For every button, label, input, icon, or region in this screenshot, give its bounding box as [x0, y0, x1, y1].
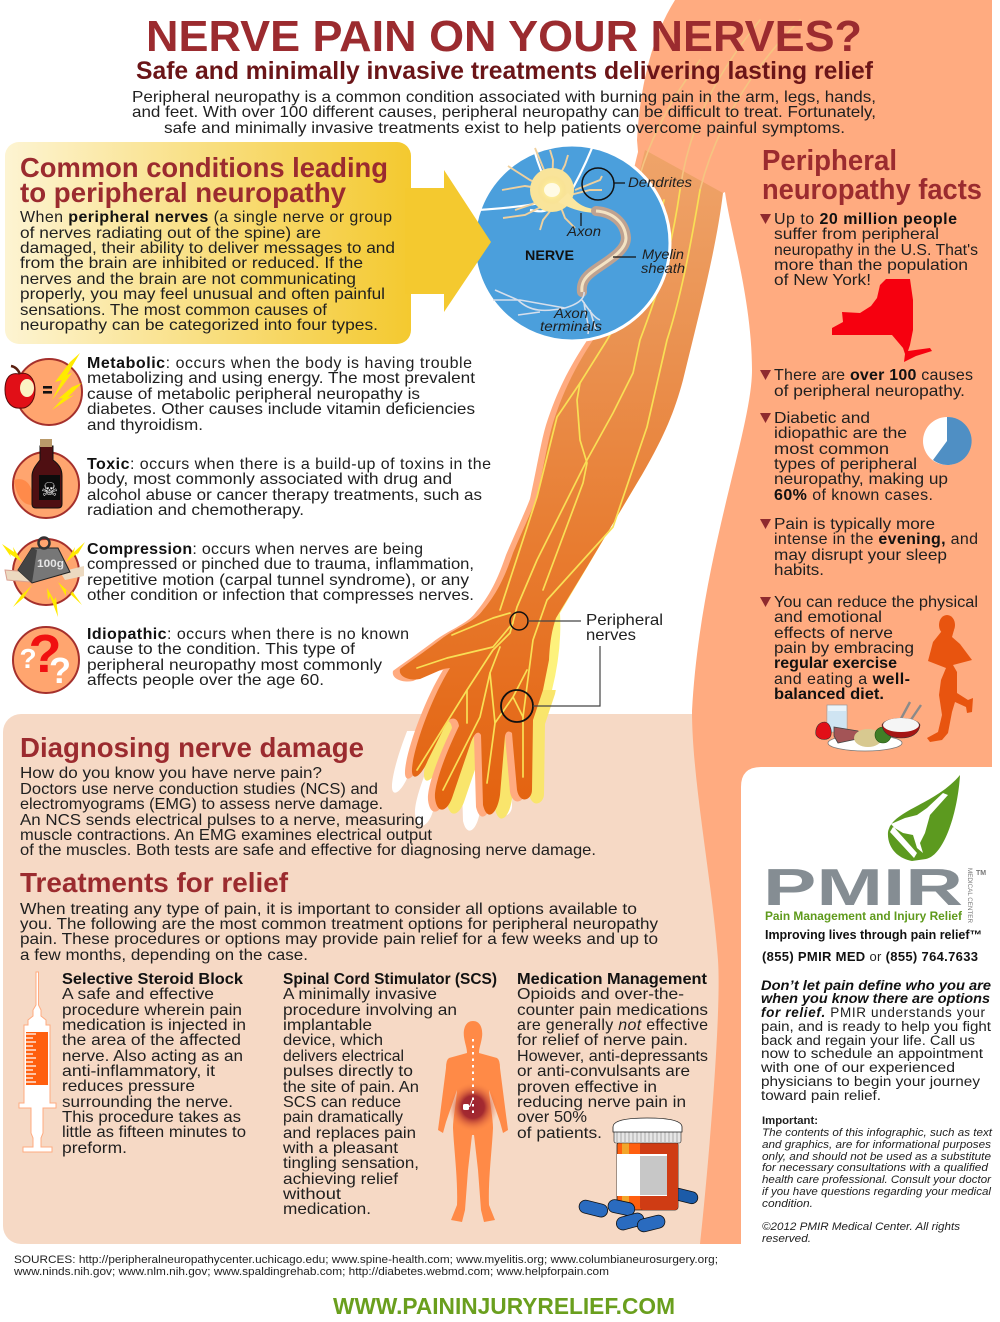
- treatment: selective steroid block: This procedure takes as: [62, 1109, 241, 1126]
- text: important disclaimer: Important:: [762, 1115, 818, 1127]
- treatment: spinal cord stimulator: achieving relief: [283, 1171, 399, 1188]
- fact: evening pain: habits.: [774, 562, 824, 579]
- heading: treatments: Treatments for relief: [20, 867, 289, 898]
- treatment: medication management: However, anti-depressants: [517, 1048, 708, 1065]
- icon: New York state map: [832, 279, 932, 362]
- text: important disclaimer: and graphics, are for informational purposes: [762, 1139, 992, 1151]
- fact: over 100 causes: There are over 100 causes: [774, 367, 973, 384]
- fact: diabetic and idiopathic: Diabetic and: [774, 410, 870, 427]
- intro text: and feet. With over 100 different causes, peripheral neuropathy can be difficult to treat. Fortunately,: [132, 104, 876, 121]
- text: sources: [13, 1254, 718, 1278]
- fact: diabetic and idiopathic: neuropathy, making up: [774, 471, 948, 488]
- text: compression: repetitive motion (carpal tunnel syndrome), or any: [87, 572, 469, 589]
- text: compression: other condition or infection that compresses nerves.: [87, 587, 474, 604]
- treatment: medication management: are generally not effective: [517, 1017, 708, 1034]
- icon: compression weight: 100g: [37, 558, 64, 570]
- treatment: selective steroid block: surrounding the nerve.: [62, 1094, 233, 1111]
- panel: common conditions: [5, 142, 411, 344]
- treatment: spinal cord stimulator: SCS can reduce: [283, 1094, 401, 1111]
- text: metabolic: metabolizing and using energy. The most prevalent: [87, 370, 476, 387]
- heading: facts: [762, 145, 982, 206]
- fact: diabetic and idiopathic: 60% of known cases.: [774, 487, 933, 504]
- text: call to action: toward pain relief.: [761, 1088, 881, 1103]
- fact: evening pain: may disrupt your sleep: [774, 547, 947, 564]
- callout: peripheral nerves: nerves: [586, 627, 636, 644]
- icon: runner: [927, 615, 973, 742]
- treatment: spinal cord stimulator: without: [282, 1186, 342, 1203]
- heading: facts: Peripheral: [762, 145, 897, 177]
- heading: common conditions: [20, 152, 388, 208]
- treatment: spinal cord stimulator: procedure involving an: [283, 1002, 457, 1019]
- text: diagnosing body: Doctors use nerve conduction studies (NCS) and: [20, 781, 378, 798]
- fact: diabetic and idiopathic: idiopathic are the: [774, 425, 907, 442]
- text: metabolic: Metabolic: occurs when the body is having trouble: [87, 355, 472, 372]
- treatment: selective steroid block: the area of the affected: [62, 1032, 241, 1049]
- text: treatments body: you. The following are the most common treatment options for peripheral neuropathy: [20, 916, 658, 933]
- icon: compression weight: [2, 538, 85, 617]
- text: metabolic: cause of metabolic peripheral neuropathy is: [87, 386, 420, 403]
- fact: evening pain: [760, 516, 978, 579]
- text: metabolic: and thyroidism.: [87, 417, 203, 434]
- treatment: spinal cord stimulator: and replaces pain: [283, 1125, 416, 1142]
- fact: exercise and diet: balanced diet.: [774, 686, 884, 703]
- treatment: selective steroid block: [62, 971, 246, 1157]
- text: compression: [87, 541, 474, 604]
- text: toxic: Toxic: occurs when there is a build-up of toxins in the: [87, 456, 491, 473]
- text: compression: compressed or pinched due to trauma, inflammation,: [87, 556, 474, 573]
- text: diagnosing body: electromyograms (EMG) to assess nerve damage.: [20, 796, 383, 813]
- heading: common conditions: Common conditions leading: [20, 152, 388, 183]
- icon: healthy meal: [816, 702, 921, 751]
- fact: over 100 causes: of peripheral neuropathy.: [774, 383, 965, 400]
- text: conditions intro: of nerves radiating out of the spine) are: [20, 225, 321, 242]
- icon: question marks: [13, 624, 79, 693]
- text: toxic: body, most commonly associated with drug and: [87, 471, 452, 488]
- panel: diagnosing text: [20, 732, 596, 859]
- diagram labels: NERVE: [525, 247, 574, 263]
- illustration: arm with peripheral nerves: [380, 20, 800, 831]
- fact: exercise and diet: pain by embracing: [774, 640, 914, 657]
- treatment: medication management: Medication Management: [517, 971, 708, 988]
- treatment: selective steroid block: nerve. Also acting as an: [62, 1048, 243, 1065]
- text: important disclaimer: The contents of this infographic, such as text: [762, 1127, 993, 1139]
- axon terminals: [493, 290, 600, 334]
- treatment: selective steroid block: Selective Steroid Block: [62, 971, 243, 988]
- fact: evening pain: Pain is typically more: [774, 516, 935, 533]
- text: idiopathic: cause to the condition. This type of: [87, 641, 356, 658]
- treatment: selective steroid block: preform.: [62, 1140, 127, 1157]
- treatment: selective steroid block: reduces pressure: [62, 1078, 195, 1095]
- text: toxic: [87, 456, 491, 519]
- text: call to action: now to schedule an appointment: [761, 1046, 983, 1061]
- treatment: medication management: proven effective in: [517, 1079, 657, 1096]
- text: diagnosing body: of the muscles. Both tests are safe and effective for diagnosing nerve damage.: [20, 842, 596, 859]
- text: call to action: Don’t let pain define who you are: [761, 978, 992, 993]
- text: conditions intro: neuropathy can be categorized into four types.: [20, 317, 378, 334]
- treatment: spinal cord stimulator: Spinal Cord Stimulator (SCS): [283, 971, 497, 988]
- treatment: spinal cord stimulator: medication.: [283, 1201, 371, 1218]
- treatment: medication management: [517, 971, 708, 1142]
- text: diagnosing body: How do you know you have nerve pain?: [20, 765, 322, 782]
- fact: exercise and diet: You can reduce the physical: [774, 594, 978, 611]
- fact: 20 million people: [760, 211, 978, 289]
- diagram labels: Dendrites: [628, 174, 692, 190]
- treatment: spinal cord stimulator: pulses directly to: [283, 1063, 413, 1080]
- text: metabolic: [87, 355, 476, 434]
- intro text: [132, 89, 876, 137]
- text: diagnosing body: An NCS sends electrical pulses to a nerve, measuring: [20, 812, 424, 829]
- fact: exercise and diet: effects of nerve: [774, 625, 893, 642]
- white tissue streaks: [478, 148, 592, 211]
- diagram labels: Axon: [566, 223, 601, 239]
- fact: 20 million people: more than the population: [774, 257, 968, 274]
- fact: evening pain: intense in the evening, and: [774, 531, 978, 548]
- text: conditions intro: properly, you may feel unusual and often painful: [20, 286, 385, 303]
- text: call to action: with one of our experienced: [760, 1060, 955, 1075]
- text: copyright: ©2012 PMIR Medical Center. All rights: [762, 1221, 961, 1233]
- treatment: medication management: over 50%: [517, 1109, 587, 1126]
- treatment: medication management: or anti-convulsants are: [517, 1063, 690, 1080]
- fact: 20 million people: Up to 20 million people: [774, 211, 957, 228]
- diagram labels: [525, 174, 692, 334]
- treatment: selective steroid block: medication is injected in: [62, 1017, 246, 1034]
- text: treatments body: pain. These procedures or options may provide pain relief for a few weeks and up to: [20, 931, 658, 948]
- treatment: spinal cord stimulator: device, which: [283, 1032, 383, 1049]
- callout: peripheral nerves: Peripheral: [586, 612, 663, 629]
- fact: 20 million people: of New York!: [774, 272, 871, 289]
- footer url: WWW.PAININJURYRELIEF.COM: [333, 1293, 675, 1319]
- text: conditions intro: damaged, their ability to deliver messages to and: [20, 240, 395, 257]
- panel: logo white card: [741, 767, 992, 1244]
- panel: treatments intro: [20, 867, 658, 964]
- treatment: spinal cord stimulator: implantable: [283, 1017, 372, 1034]
- treatment: spinal cord stimulator: delivers electrical: [283, 1048, 404, 1065]
- icon: question marks: ?: [28, 624, 62, 684]
- heading: diagnosing: Diagnosing nerve damage: [20, 732, 364, 763]
- fact: exercise and diet: regular exercise: [774, 655, 897, 672]
- text: call to action: back and regain your life. Call us: [761, 1033, 975, 1048]
- treatment: selective steroid block: A safe and effective: [62, 986, 214, 1003]
- fact: diabetic and idiopathic: types of peripheral: [774, 456, 917, 473]
- treatment: medication management: for relief of nerve pain.: [517, 1032, 688, 1049]
- treatment: selective steroid block: anti-inflammatory, it: [62, 1063, 216, 1080]
- arrow pointing to nerve: [405, 170, 491, 312]
- text: copyright: [762, 1221, 961, 1245]
- icon: human figure with stimulator: [438, 1021, 508, 1222]
- icon: question marks: ?: [49, 650, 71, 691]
- text: call to action: for relief. PMIR understands your: [761, 1005, 986, 1020]
- logo: PMIR: Pain Management and Injury Relief: [765, 911, 962, 923]
- intro text: safe and minimally invasive treatments exist to help patients overcome painful symptoms.: [164, 120, 845, 137]
- text: sources: SOURCES: http://peripheralneuropathycenter.uchicago.edu; www.spine-health.com; www.myelitis.org; www.columbianeurosurgery.org;: [14, 1254, 718, 1266]
- dendrite highlight circle: [582, 168, 614, 200]
- wordmark: PMIR: [763, 859, 963, 917]
- text: treatments body: a few months, depending on the case.: [20, 947, 308, 964]
- treatment: medication management: of patients.: [517, 1125, 602, 1142]
- icon: leaf: [888, 775, 960, 861]
- icon: apple equals pain: [5, 353, 82, 425]
- text: diagnosing body: muscle contractions. An EMG examines electrical output: [20, 827, 433, 844]
- diagram labels: terminals: [540, 318, 602, 334]
- text: diagnosing body: [20, 765, 596, 859]
- logo: PMIR: MEDICAL CENTER: [966, 868, 973, 923]
- contact phone numbers: (855) PMIR MED or (855) 764.7633: [762, 949, 978, 964]
- text: idiopathic: Idiopathic: occurs when there is no known: [87, 626, 409, 643]
- diagram: nerve cell circle: [474, 145, 692, 341]
- title: NERVE PAIN ON YOUR NERVES?: [146, 12, 862, 61]
- subtitle: Safe and minimally invasive treatments delivering lasting relief: [136, 57, 874, 85]
- text: sources: www.ninds.nih.gov; www.nlm.nih.gov; www.spaldingrehab.com; http://diabetes.webmd.com; www.helpforpain.com: [13, 1266, 609, 1278]
- diagram labels: Myelin: [642, 246, 684, 262]
- treatment: spinal cord stimulator: tingling sensation,: [283, 1155, 419, 1172]
- text: treatments body: [20, 901, 658, 964]
- myelin sheath axon: [582, 211, 626, 292]
- fact: diabetic and idiopathic: most common: [774, 441, 889, 458]
- text: important disclaimer: condition.: [762, 1198, 813, 1210]
- treatment: spinal cord stimulator: A minimally invasive: [283, 986, 437, 1003]
- logo: PMIR: Improving lives through pain relief™: [765, 928, 982, 942]
- text: call to action: [760, 978, 992, 1103]
- panel: peach body silhouette with facts: [637, 0, 992, 1244]
- text: conditions intro: from the brain are inhibited or reduced. If the: [20, 255, 363, 272]
- icon: pill bottle and capsules: [578, 1118, 699, 1233]
- fact: exercise and diet: and eating a well-: [774, 671, 910, 688]
- text: call to action: pain, and is ready to help you fight: [761, 1019, 991, 1034]
- fact: exercise and diet: [760, 594, 978, 703]
- fact: diabetic and idiopathic: [760, 410, 948, 504]
- intro text: Peripheral neuropathy is a common condition associated with burning pain in the arm, legs, hands,: [132, 89, 876, 106]
- icon: question marks: ?: [19, 643, 37, 674]
- text: important disclaimer: [762, 1115, 993, 1210]
- callout: peripheral nerves: [501, 612, 663, 722]
- treatment: selective steroid block: little as fifteen minutes to: [62, 1124, 246, 1141]
- fact: 20 million people: suffer from peripheral: [774, 226, 939, 243]
- heading: common conditions: to peripheral neuropathy: [20, 177, 346, 208]
- text: idiopathic: peripheral neuropathy most commonly: [87, 657, 382, 674]
- text: conditions intro: When peripheral nerves (a single nerve or group: [20, 209, 392, 226]
- heading: facts: neuropathy facts: [762, 174, 982, 206]
- logo: PMIR: [763, 775, 986, 942]
- treatment: spinal cord stimulator: the site of pain. An: [283, 1079, 419, 1096]
- text: call to action: when you know there are options: [761, 991, 991, 1006]
- text: idiopathic: affects people over the age 60.: [87, 672, 324, 689]
- treatment: spinal cord stimulator: pain dramatically: [283, 1109, 403, 1126]
- fact: 20 million people: neuropathy in the U.S. That's: [774, 242, 978, 259]
- text: copyright: reserved.: [762, 1233, 811, 1245]
- text: important disclaimer: if you have questions regarding your medical: [762, 1186, 992, 1198]
- diagram labels: sheath: [641, 260, 685, 276]
- treatment: medication management: reducing nerve pain in: [517, 1094, 686, 1111]
- treatment: spinal cord stimulator: with a pleasant: [282, 1140, 399, 1157]
- text: important disclaimer: health care professional. Consult your doctor: [762, 1174, 992, 1186]
- text: toxic: radiation and chemotherapy.: [87, 502, 304, 519]
- panel: diagnosis and treatments background: [3, 714, 723, 1244]
- text: treatments body: When treating any type of pain, it is important to consider all options available to: [20, 901, 637, 918]
- panel: peripheral neuropathy facts: [760, 145, 982, 751]
- text: toxic: alcohol abuse or cancer therapy treatments, such as: [87, 487, 482, 504]
- treatment: selective steroid block: procedure wherein pain: [62, 1002, 242, 1019]
- treatment: medication management: counter pain medications: [517, 1002, 708, 1019]
- icon: poison bottle: [13, 439, 79, 518]
- treatment: medication management: Opioids and over-the-: [517, 986, 684, 1003]
- text: call to action: physicians to begin your journey: [761, 1074, 980, 1089]
- treatment: spinal cord stimulator: [282, 971, 497, 1218]
- text: conditions intro: [20, 209, 395, 334]
- icon: syringe: [19, 972, 56, 1152]
- text: important disclaimer: only, and should not be used as a substitute: [762, 1151, 991, 1163]
- text: conditions intro: sensations. The most common causes of: [20, 302, 328, 319]
- text: conditions intro: nerves and the brain are not communicating: [20, 271, 356, 288]
- fact: over 100 causes: [760, 367, 973, 400]
- diagram labels: Axon: [553, 305, 588, 321]
- icon: poison bottle: ☠: [41, 479, 58, 501]
- chart: 60 percent pie: [923, 417, 972, 465]
- text: idiopathic: [87, 626, 409, 689]
- text: important disclaimer: for necessary consultations with a qualified: [762, 1162, 989, 1174]
- logo: PMIR: TM: [976, 870, 986, 877]
- text: compression: Compression: occurs when nerves are being: [87, 541, 423, 558]
- fact: exercise and diet: and emotional: [774, 609, 882, 626]
- text: metabolic: diabetes. Other causes include vitamin deficiencies: [87, 401, 475, 418]
- dendrites: [502, 148, 602, 230]
